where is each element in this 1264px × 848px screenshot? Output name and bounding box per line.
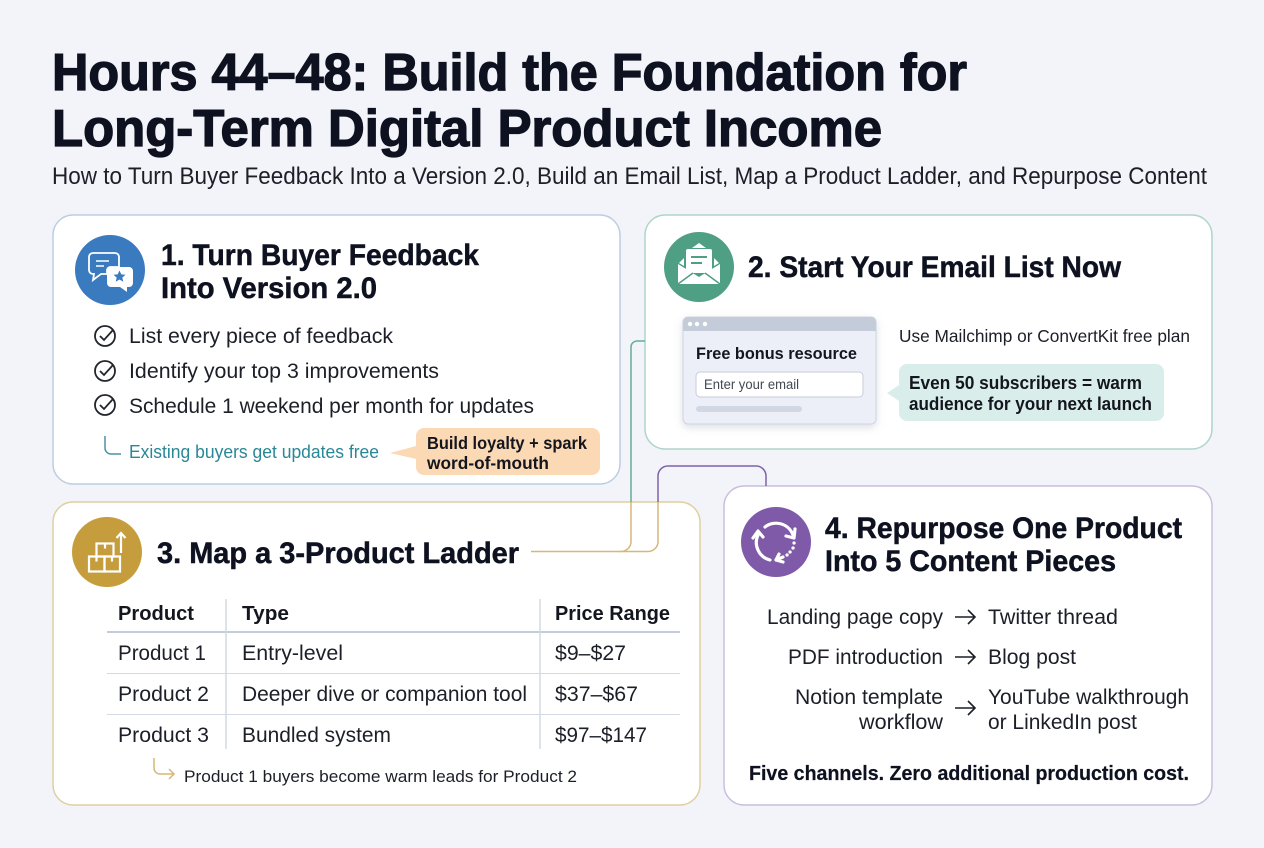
title: Long-Term Digital Product Income <box>52 100 882 158</box>
mapping list <box>767 606 1189 734</box>
callout: subscribers: Even 50 subscribers = warm <box>909 373 1142 393</box>
heading: 1: Into Version 2.0 <box>161 272 377 305</box>
table: ladder: $37–$67 <box>555 683 638 706</box>
checklist: Identify your top 3 improvements <box>129 360 439 383</box>
heading: 4: Into 5 Content Pieces <box>825 545 1116 578</box>
icon: cycle arrows <box>741 507 811 577</box>
signup form mockup: Enter your email <box>704 377 799 392</box>
heading: 1 <box>161 239 479 305</box>
table: ladder: Entry-level <box>242 642 343 665</box>
arrow: ladder to repurpose <box>620 466 766 552</box>
callout: loyalty <box>390 428 600 475</box>
table: ladder: Type <box>242 603 289 625</box>
icon: boxes with arrow <box>72 517 142 587</box>
mapping list: Twitter thread <box>988 606 1118 629</box>
checklist: List every piece of feedback <box>129 325 393 348</box>
table: ladder: Bundled system <box>242 724 391 747</box>
heading: 4 <box>825 512 1182 578</box>
mapping list: PDF introduction <box>788 646 943 669</box>
title: Hours 44–48: Build the Foundation for <box>52 44 967 102</box>
table: ladder: Product <box>118 603 194 625</box>
table: ladder <box>107 599 680 749</box>
table: ladder: Product 3 <box>118 724 209 747</box>
table: ladder: Product 1 <box>118 642 206 665</box>
callout: subscribers: audience for your next launch <box>909 394 1152 414</box>
panel: 3 product ladder <box>53 502 700 805</box>
icon: chat bubbles with star <box>75 235 145 305</box>
mapping list: or LinkedIn post <box>988 711 1137 734</box>
panel: 1 buyer feedback <box>53 215 620 484</box>
signup form mockup <box>683 317 876 424</box>
heading: 4: 4. Repurpose One Product <box>825 512 1182 545</box>
callout: subscribers <box>887 364 1164 421</box>
heading: 3: 3. Map a 3-Product Ladder <box>157 537 519 570</box>
text: tools: Use Mailchimp or ConvertKit free plan <box>899 326 1190 346</box>
mapping list: workflow <box>858 711 944 734</box>
mapping list: YouTube walkthrough <box>988 686 1189 709</box>
note: existing buyers: Existing buyers get updates free <box>129 442 379 462</box>
table: ladder: Price Range <box>555 603 670 625</box>
table: ladder: Product 2 <box>118 683 209 706</box>
title <box>52 44 967 158</box>
mapping list: Blog post <box>988 646 1076 669</box>
arrow: ladder to email list <box>531 341 645 552</box>
mapping list: Notion template <box>795 686 943 709</box>
takeaway: Five channels. Zero additional production cost. <box>749 763 1189 785</box>
callout: loyalty: Build loyalty + spark <box>427 433 587 453</box>
note: warm leads: Product 1 buyers become warm leads for Product 2 <box>184 768 577 786</box>
table: ladder: $97–$147 <box>555 724 647 747</box>
heading: 1: 1. Turn Buyer Feedback <box>161 239 479 272</box>
table: ladder: Deeper dive or companion tool <box>242 683 527 706</box>
signup form mockup: Free bonus resource <box>696 345 857 363</box>
panel: 4 repurpose <box>724 486 1212 805</box>
heading: 2: 2. Start Your Email List Now <box>748 251 1122 284</box>
icon: envelope <box>664 232 734 302</box>
subtitle: How to Turn Buyer Feedback Into a Version 2.0, Build an Email List, Map a Product Ladder, and Repurpose Content <box>52 163 1207 190</box>
checklist: Schedule 1 weekend per month for updates <box>129 395 534 418</box>
checklist <box>95 325 534 418</box>
table: ladder: $9–$27 <box>555 642 626 665</box>
callout: loyalty: word-of-mouth <box>426 453 549 473</box>
mapping list: Landing page copy <box>767 606 943 629</box>
note: existing buyers <box>105 436 379 462</box>
panel: 2 email list <box>645 215 1212 449</box>
note: warm leads <box>154 758 577 786</box>
